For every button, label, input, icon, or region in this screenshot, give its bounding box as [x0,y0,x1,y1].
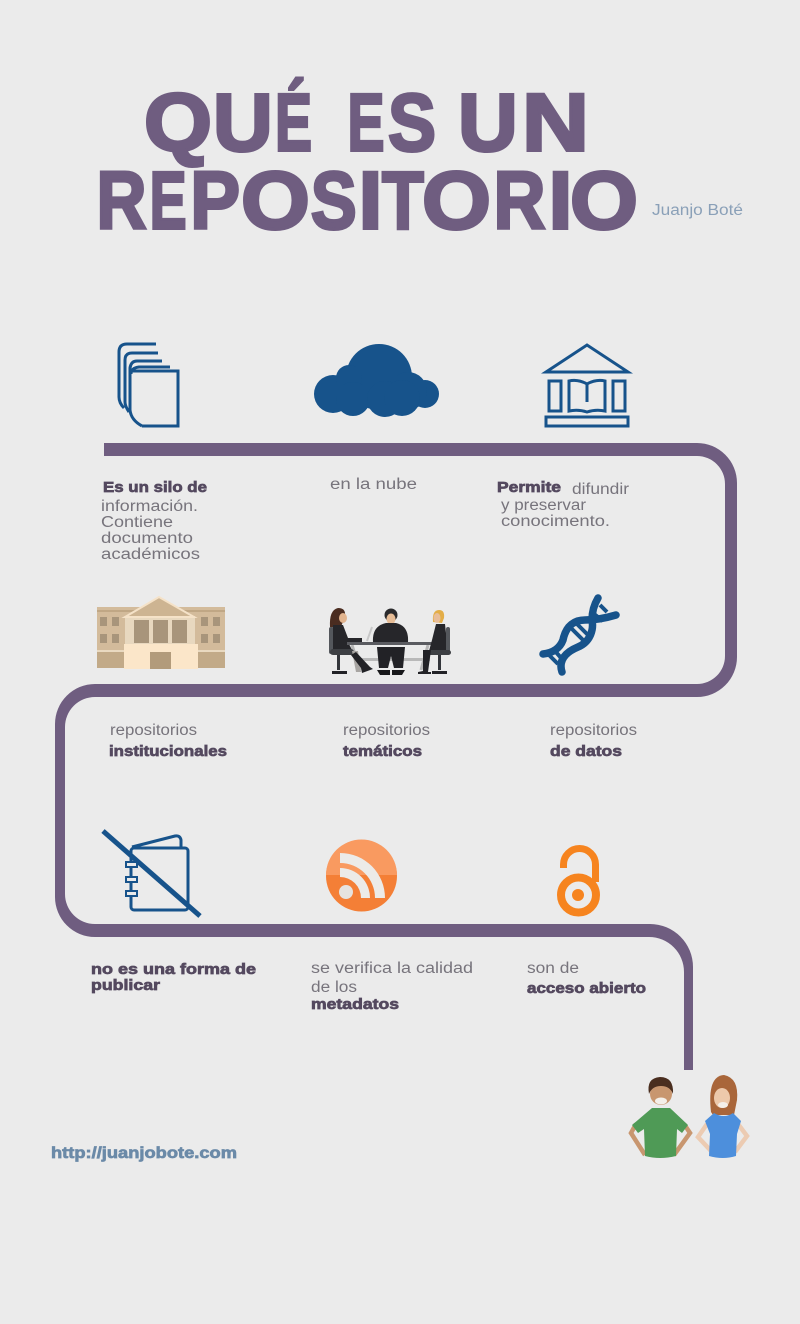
title: S [388,78,436,168]
text: es un silo: Es un silo de [103,479,207,496]
text: son de acceso abierto: acceso abierto [527,980,646,997]
person centre [373,608,408,675]
title: É [275,78,312,168]
title: O [570,156,638,246]
person left [329,608,373,674]
text: es un silo: información. [101,498,198,515]
title: R [494,156,546,246]
title: P [190,156,240,246]
text: repositorios de datos: repositorios [550,722,637,739]
text: en la nube: en la nube [330,476,417,493]
icon: crossed-out notebook [103,831,200,916]
title: S [311,156,357,246]
text: no es una forma de publicar [91,961,256,994]
text: permite difundir: difundir [572,481,629,498]
text: es un silo: documento [101,530,193,547]
text: se verifica la calidad [311,960,473,1013]
title: R [96,156,146,246]
title [96,78,638,246]
text: son de acceso abierto: son de [527,960,579,977]
icon: open access lock [561,848,596,912]
icon: man in green shirt [631,1077,690,1158]
text: es un silo: académicos [101,546,200,563]
text: repositorios tematicos: repositorios [343,722,430,739]
text: repositorios institucionales [109,722,227,760]
text: es un silo: Contiene [101,514,173,531]
title: E [348,78,384,168]
text: se verifica la calidad: metadatos [311,996,399,1013]
text: permite difundir: Permite [497,479,561,496]
text: repositorios de datos: de datos [550,743,622,760]
icon: library with open book [546,345,628,426]
text: repositorios de datos [550,722,637,760]
text: se verifica la calidad: de los [311,979,357,996]
icon: woman in blue shirt [698,1075,747,1158]
person right [418,610,451,674]
title: T [382,156,424,246]
text: es un silo [101,479,207,563]
text: repositorios institucionales: institucionales [109,743,227,760]
author name: Juanjo Boté [652,202,743,219]
text: repositorios institucionales: repositorios [110,722,197,739]
title: N [522,78,589,168]
text: repositorios tematicos [343,722,430,760]
title: O [241,156,310,246]
title: U [213,78,273,168]
icon: cloud [314,344,439,417]
icon: stacked documents [119,344,178,426]
title: E [150,156,187,246]
website link: http://juanjobote.com [51,1145,237,1162]
text: repositorios tematicos: temáticos [343,743,422,760]
title: U [458,78,518,168]
text: permite difundir [497,479,629,530]
title: I [548,156,572,246]
winding path line [55,443,737,1070]
title: O [422,156,491,246]
title: I [358,156,382,246]
text: permite difundir: conocimento. [501,513,610,530]
text: son de acceso abierto [527,960,646,997]
icon: dna helix [543,598,616,672]
text: permite difundir: y preservar [501,497,586,514]
icon: institutional building [97,597,225,669]
icon: rss feed [326,839,397,912]
icon: meeting of three people [329,608,451,675]
text: no es una forma de publicar: publicar [91,977,160,994]
text: se verifica la calidad: se verifica la calidad [311,960,473,977]
table top [347,642,434,645]
title: Q [144,78,212,168]
text: no es una forma de publicar: no es una forma de [91,961,256,978]
